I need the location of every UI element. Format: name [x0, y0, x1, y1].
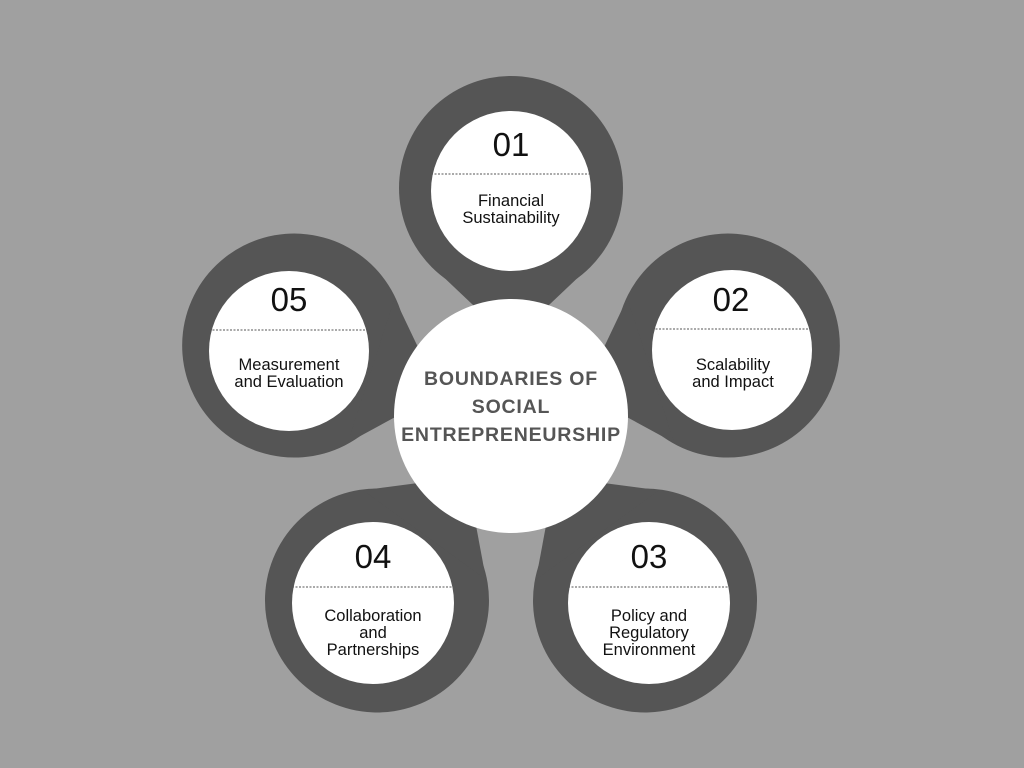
item 02: Scalability — [696, 356, 771, 374]
item 01: 01 — [493, 126, 529, 163]
center title: BOUNDARIES OF — [424, 368, 598, 390]
pin: 04 — [221, 411, 558, 757]
item 01: Financial — [478, 192, 544, 210]
pin: 03 — [464, 411, 801, 757]
item 05: Measurement — [239, 356, 340, 374]
item 03: Regulatory — [609, 624, 690, 642]
item 02 — [652, 270, 812, 430]
pin: 01 — [399, 76, 623, 341]
item 04: 04 — [355, 538, 391, 575]
center title: ENTREPRENEURSHIP — [401, 424, 621, 446]
item 03: Policy and — [611, 607, 687, 625]
center title: SOCIAL — [472, 396, 550, 418]
item 03 — [568, 522, 730, 684]
center circle — [394, 299, 628, 533]
item 02: 02 — [713, 281, 749, 318]
item 01 — [431, 111, 591, 271]
item 04: and — [359, 624, 387, 642]
item 04: Collaboration — [324, 607, 422, 625]
item 05: 05 — [271, 281, 307, 318]
item 03: Environment — [603, 641, 696, 659]
item 05: and Evaluation — [234, 373, 344, 391]
item 02: and Impact — [692, 373, 774, 391]
item 05 — [209, 271, 369, 431]
item 03: 03 — [631, 538, 667, 575]
item 01: Sustainability — [462, 209, 560, 227]
item 04 — [292, 522, 454, 684]
pin: 02 — [548, 204, 869, 499]
item 04: Partnerships — [327, 641, 419, 659]
pin: 05 — [153, 204, 474, 499]
